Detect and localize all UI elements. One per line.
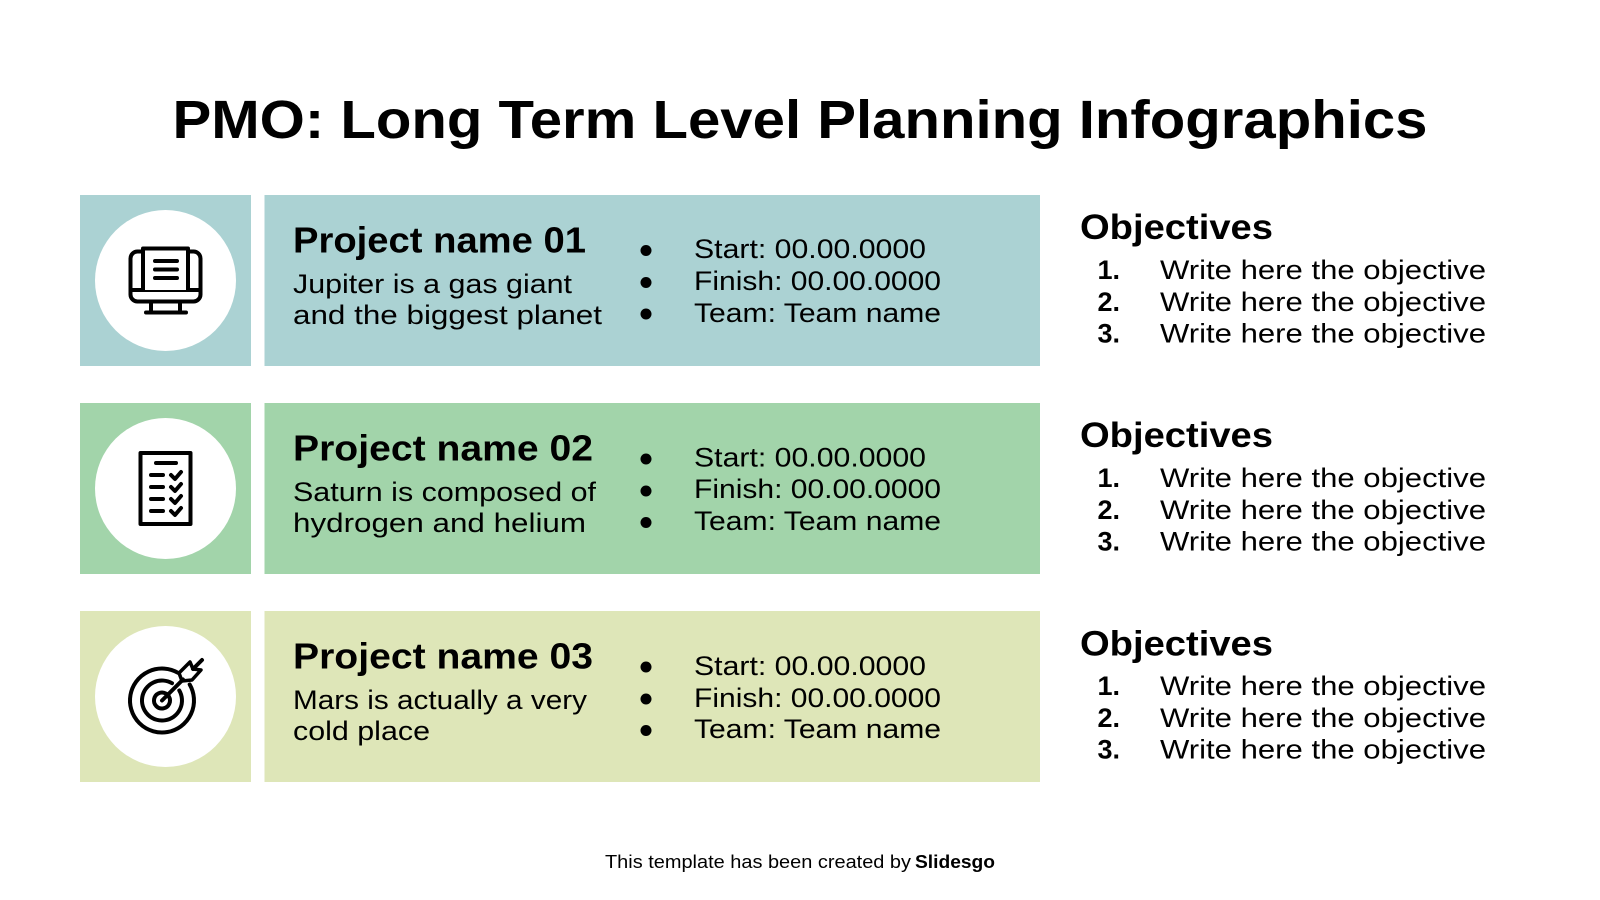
description 03: Mars is actually a very [293, 685, 588, 715]
schedule 01: Start: 00.00.0000 [694, 234, 926, 264]
objectives 01 [1080, 208, 1486, 348]
project band 01 [264, 195, 1040, 366]
schedule 01: Finish: 00.00.0000 [694, 266, 941, 296]
icon tile 01 [80, 195, 251, 366]
schedule 02: Team: Team name [694, 506, 941, 536]
objectives list 03: Write here the objective [1160, 703, 1486, 733]
schedule 01: Team: Team name [694, 298, 941, 328]
project band 02 [264, 403, 1040, 574]
objectives numbers 03: 3. [1097, 734, 1120, 764]
objectives list 03: Write here the objective [1160, 734, 1486, 764]
description 02: Saturn is composed of [293, 477, 597, 507]
bullets 03 [640, 662, 652, 736]
objectives numbers 01: 2. [1097, 287, 1120, 317]
objectives list 02: Write here the objective [1160, 463, 1486, 493]
title: PMO: Long Term Level Planning Infographics [172, 90, 1428, 150]
description 02: hydrogen and helium [293, 508, 586, 538]
schedule 03: Finish: 00.00.0000 [694, 683, 941, 713]
project name 02: Project name 02 [293, 428, 593, 468]
footer credit [605, 852, 995, 872]
objectives list 02: Write here the objective [1160, 526, 1486, 556]
description 03: cold place [293, 716, 430, 746]
icon: target with arrow [130, 660, 202, 733]
icon circle 03 [95, 626, 236, 767]
objectives numbers 03: 2. [1097, 703, 1120, 733]
objectives 02 [1080, 416, 1486, 556]
objectives list 01: Write here the objective [1160, 287, 1486, 317]
objectives numbers 02: 1. [1097, 463, 1120, 493]
icon: monitor with document [130, 248, 200, 312]
objectives numbers 01: 3. [1097, 318, 1120, 348]
bullets 01 [640, 245, 652, 320]
objectives list 02: Write here the objective [1160, 495, 1486, 525]
bullets 02 [640, 454, 652, 528]
icon: checklist [140, 453, 190, 524]
icon circle 01 [95, 210, 236, 351]
icon tile 02 [80, 403, 251, 574]
objectives numbers 01: 1. [1097, 255, 1120, 285]
objectives list 01: Write here the objective [1160, 318, 1486, 348]
schedule 02: Start: 00.00.0000 [694, 442, 926, 472]
icon tile 03 [80, 611, 251, 782]
project band 03 [264, 611, 1040, 782]
panel: project 03 [80, 611, 1040, 782]
objectives heading 01: Objectives [1080, 208, 1273, 247]
panel: project 01 [80, 195, 1040, 366]
objectives 03 [1080, 624, 1486, 764]
objectives numbers 03: 1. [1097, 671, 1120, 701]
objectives heading 03: Objectives [1080, 624, 1273, 664]
objectives numbers 02: 2. [1097, 495, 1120, 525]
description 01: and the biggest planet [293, 300, 603, 330]
schedule 03: Team: Team name [694, 714, 941, 744]
objectives heading 02: Objectives [1080, 416, 1273, 455]
description 01: Jupiter is a gas giant [293, 269, 573, 299]
objectives list 01: Write here the objective [1160, 255, 1486, 285]
schedule 02: Finish: 00.00.0000 [694, 474, 941, 504]
objectives numbers 02: 3. [1097, 526, 1120, 556]
project name 03: Project name 03 [293, 636, 593, 676]
objectives list 03: Write here the objective [1160, 671, 1486, 701]
panel: project 02 [80, 403, 1040, 574]
icon circle 02 [95, 418, 236, 559]
project name 01: Project name 01 [293, 220, 586, 260]
footer text: This template has been created by [605, 852, 911, 872]
footer brand: Slidesgo [915, 852, 995, 872]
schedule 03: Start: 00.00.0000 [694, 651, 926, 681]
